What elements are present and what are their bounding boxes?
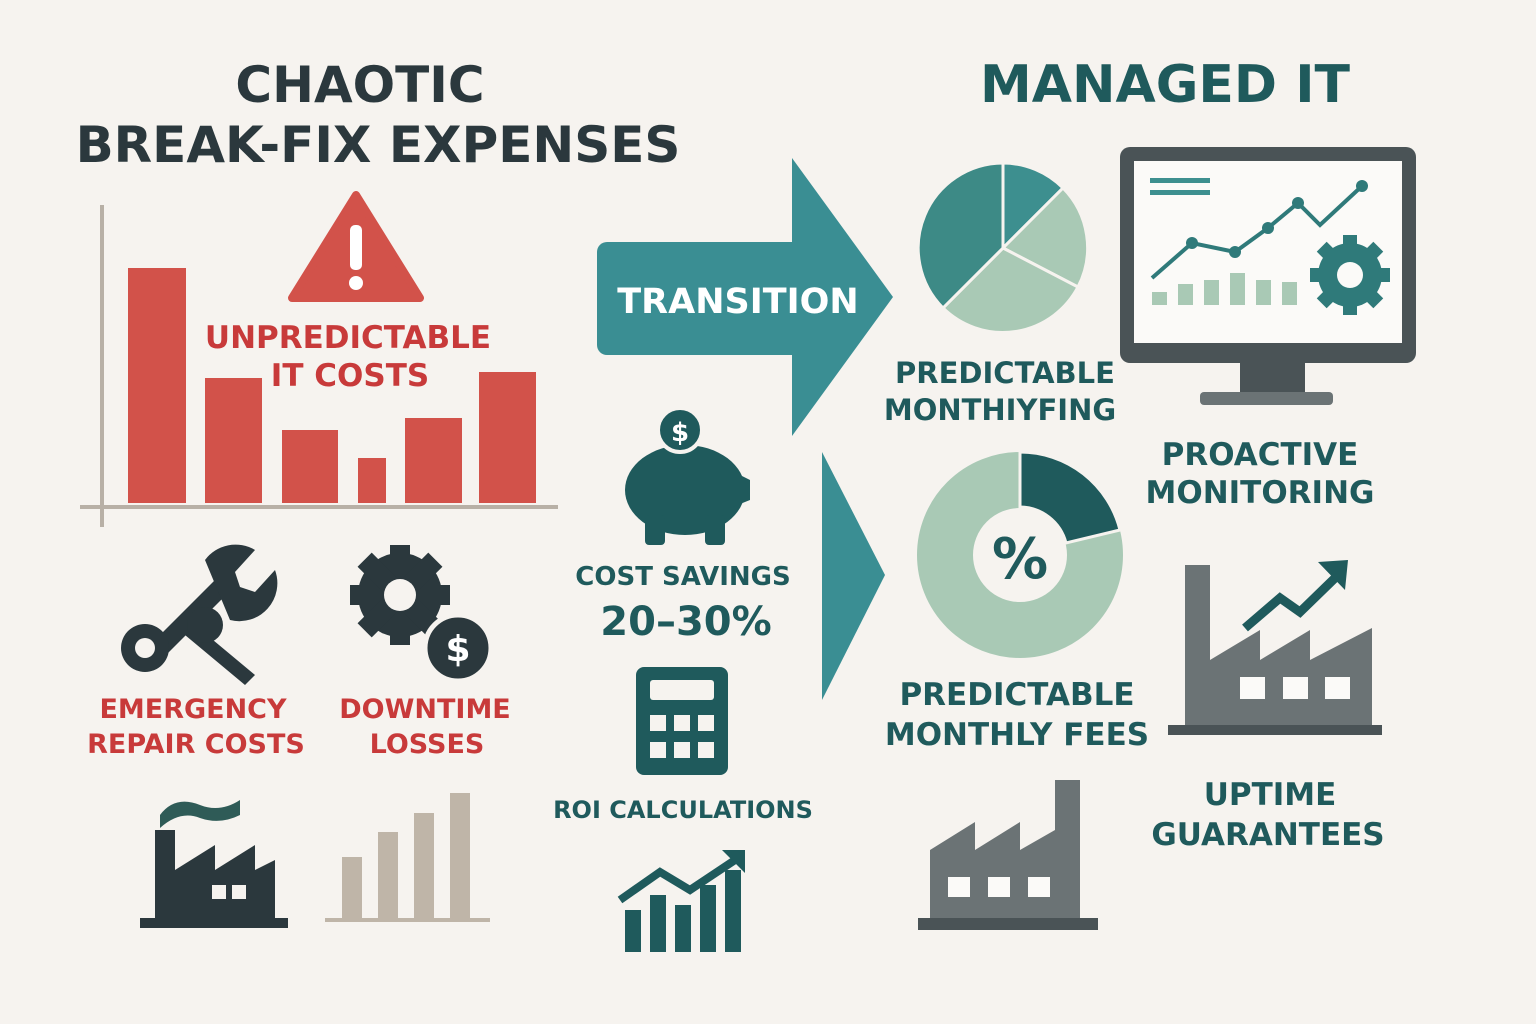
text: proactive monitoring: PROACTIVE: [1162, 437, 1358, 473]
text: downtime losses: [339, 694, 511, 760]
bar chart: unpredictable costs: [80, 205, 558, 527]
title: managed it: MANAGED IT: [980, 55, 1351, 115]
text: cost savings: COST SAVINGS: [575, 562, 791, 592]
icon: wrench: [121, 545, 277, 685]
text: cost savings: [575, 562, 791, 645]
icon: piggy bank: $: [671, 418, 689, 448]
text: emergency repair costs: REPAIR COSTS: [87, 729, 305, 760]
text: predictable monthiyfing: [884, 356, 1116, 427]
chart: pie: [918, 163, 1088, 333]
chart: donut: %: [992, 527, 1048, 592]
title: chaotic break-fix expenses: [76, 56, 680, 174]
icon: gear with dollar: [350, 545, 491, 681]
icon: dark factory: [140, 800, 288, 928]
arrow: second: [822, 452, 885, 700]
text: downtime losses: DOWNTIME: [339, 694, 511, 725]
text: predictable monthiyfing: PREDICTABLE: [895, 356, 1115, 390]
title: chaotic break-fix expenses: BREAK-FIX EXPENSES: [76, 116, 680, 174]
text: unpredictable it costs: [205, 320, 491, 394]
icon: calculator: [636, 667, 728, 775]
icon: gear with dollar: $: [445, 629, 471, 670]
text: uptime guarantees: GUARANTEES: [1151, 817, 1385, 853]
text: emergency repair costs: [87, 694, 305, 760]
icon: gray bar chart: [325, 793, 490, 922]
text: predictable monthly fees: MONTHLY FEES: [885, 717, 1149, 753]
text: uptime guarantees: UPTIME: [1204, 777, 1336, 813]
icon: piggy bank: [625, 408, 750, 545]
text: proactive monitoring: MONITORING: [1146, 475, 1374, 511]
arrow: transition: TRANSITION: [617, 282, 859, 322]
text: unpredictable it costs: UNPREDICTABLE: [205, 320, 491, 356]
icon: monitor: [1120, 147, 1416, 405]
text: predictable monthly fees: PREDICTABLE: [899, 677, 1135, 713]
text: predictable monthly fees: [885, 677, 1149, 753]
text: proactive monitoring: [1146, 437, 1374, 511]
text: cost savings: 20–30%: [600, 599, 772, 645]
arrow: transition: [597, 158, 893, 436]
icon: gray factory: [918, 780, 1098, 930]
icon: factory with arrow: [1168, 560, 1382, 735]
text: predictable monthiyfing: MONTHIYFING: [884, 393, 1116, 427]
text: uptime guarantees: [1151, 777, 1385, 853]
text: unpredictable it costs: IT COSTS: [271, 358, 429, 394]
icon: growth chart: [620, 850, 745, 952]
text: roi calculations: ROI CALCULATIONS: [553, 796, 813, 824]
chart: donut: [945, 452, 1120, 630]
text: emergency repair costs: EMERGENCY: [99, 694, 287, 725]
title: chaotic break-fix expenses: CHAOTIC: [235, 56, 485, 114]
text: downtime losses: LOSSES: [370, 729, 484, 760]
icon: warning triangle: [292, 195, 420, 298]
